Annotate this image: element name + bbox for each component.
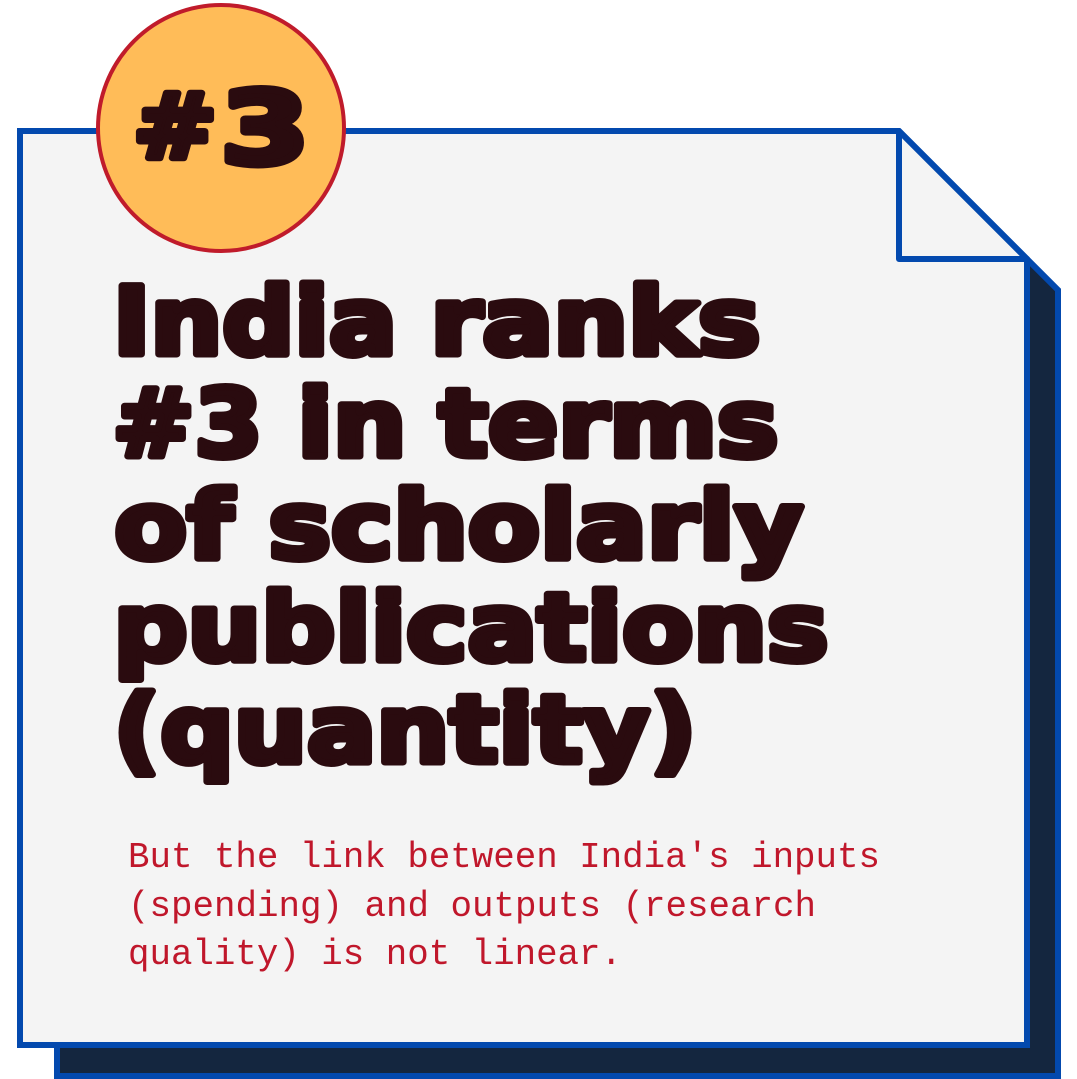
panel: front note sheet bbox=[20, 131, 1027, 1045]
heading: in bbox=[298, 370, 406, 479]
badge: rank number bbox=[98, 5, 344, 251]
badge: rank number: # bbox=[133, 75, 217, 180]
icon: folded corner bbox=[899, 131, 1027, 259]
heading: ranks bbox=[430, 268, 760, 377]
heading: of bbox=[114, 472, 234, 581]
heading: publications bbox=[114, 574, 828, 683]
heading: India bbox=[113, 268, 397, 377]
badge: rank number: 3 bbox=[221, 70, 309, 187]
body text: quality) is not linear. bbox=[128, 934, 622, 975]
body text bbox=[128, 837, 880, 975]
heading bbox=[112, 268, 828, 785]
heading: scholarly bbox=[268, 472, 803, 581]
body text: But the link between India's inputs bbox=[128, 837, 880, 878]
heading: #3 bbox=[112, 370, 262, 479]
panel: back shadow sheet bbox=[57, 259, 1058, 1076]
heading: (quantity) bbox=[114, 676, 696, 785]
heading: terms bbox=[438, 370, 778, 479]
body text: (spending) and outputs (research bbox=[128, 886, 816, 927]
